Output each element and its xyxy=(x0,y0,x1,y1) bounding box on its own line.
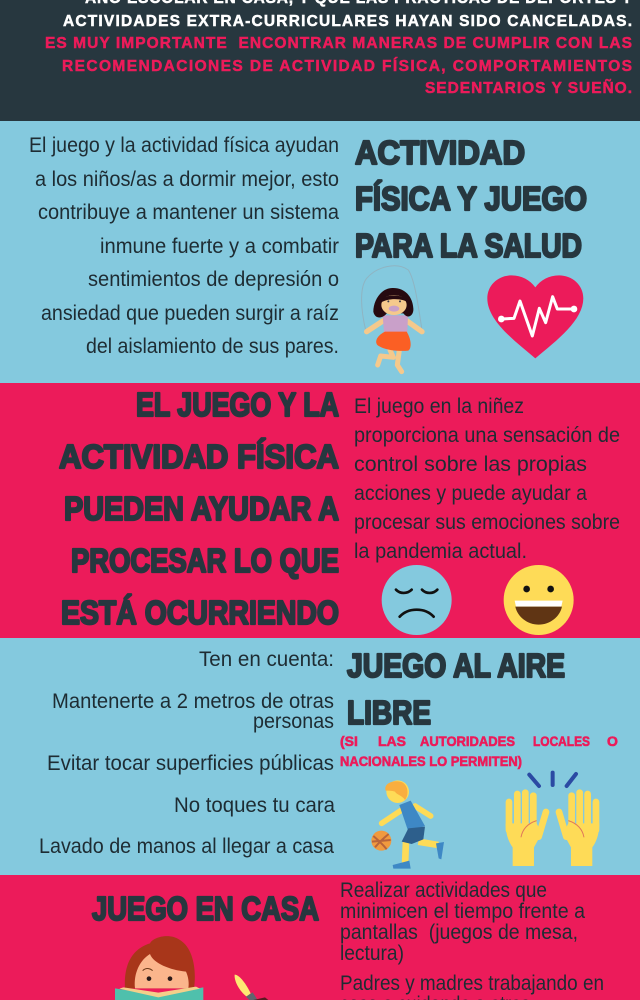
text block: health benefits xyxy=(29,134,339,358)
clap marks xyxy=(529,773,576,786)
text block: ten en cuenta: personas xyxy=(253,710,334,733)
right hand xyxy=(559,793,599,866)
text block: actividades en casa: Padres y madres trabajando en xyxy=(340,972,604,995)
text block: ten en cuenta: Lavado de manos al llegar a casa xyxy=(39,835,334,858)
icon: happy face xyxy=(504,565,574,635)
text block: health benefits: El juego y la actividad física ayudan xyxy=(29,134,339,157)
text block: sensación de control: proporciona una sensación de xyxy=(354,424,620,447)
text block: ten en cuenta: Ten en cuenta: xyxy=(199,648,334,671)
panel: procesar lo que está ocurriendo xyxy=(0,383,640,638)
icon: raised hands xyxy=(506,773,599,866)
heading: procesar: ESTÁ OCURRIENDO xyxy=(61,594,339,631)
text block: health benefits: contribuye a mantener un sistema xyxy=(38,201,339,224)
text block: actividades en casa xyxy=(340,879,604,1000)
text block: sensación de control xyxy=(354,395,620,563)
text block: sensación de control: control sobre las propias xyxy=(354,453,587,476)
heading: actividad física xyxy=(355,134,587,264)
text block: ten en cuenta: Evitar tocar superficies públicas xyxy=(47,752,334,775)
heading: procesar xyxy=(59,386,339,631)
text block: health benefits: inmune fuerte y a combatir xyxy=(100,235,339,258)
text block: sensación de control: procesar sus emociones sobre xyxy=(354,511,620,534)
panel: actividad física y juego xyxy=(0,121,640,383)
text block: ten en cuenta: No toques tu cara xyxy=(174,794,335,817)
panel: juego en casa xyxy=(0,875,640,1000)
text block: ten en cuenta xyxy=(39,648,335,858)
intro text white xyxy=(63,0,633,30)
icon: girl jumping rope xyxy=(362,266,422,372)
panel: juego al aire libre xyxy=(0,638,640,875)
icon: sad face xyxy=(382,565,452,635)
heading: actividad física: ACTIVIDAD xyxy=(355,134,525,171)
subheading: autoridades: NACIONALES LO PERMITEN) xyxy=(340,753,522,769)
text block: actividades en casa: pantallas (juegos de mesa, xyxy=(340,921,578,944)
text block: health benefits: ansiedad que pueden surgir a raíz xyxy=(41,302,339,325)
subheading: autoridades: AUTORIDADES xyxy=(420,733,515,749)
text block: actividades en casa: Realizar actividades que xyxy=(340,879,547,902)
subheading: autoridades: (SI xyxy=(340,733,358,749)
panel: intro xyxy=(0,0,640,121)
heading: procesar: PUEDEN AYUDAR A xyxy=(64,490,339,527)
text block: actividades en casa: minimicen el tiempo frente a xyxy=(340,900,585,923)
heading: actividad física: FÍSICA Y JUEGO xyxy=(355,180,587,217)
text block: sensación de control: El juego en la niñez xyxy=(354,395,524,418)
subheading: autoridades: O xyxy=(607,733,618,749)
heading: juego al aire libre: LIBRE xyxy=(347,694,431,731)
heading: actividad física: PARA LA SALUD xyxy=(355,227,582,264)
intro text pink xyxy=(45,35,632,97)
heading: procesar: PROCESAR LO QUE xyxy=(71,542,339,579)
text block: health benefits: sentimientos de depresión o xyxy=(88,268,339,291)
heading: juego al aire libre: JUEGO AL AIRE xyxy=(347,647,565,684)
heading: juego en casa: JUEGO EN CASA xyxy=(92,890,319,927)
icon: child dribbling ball xyxy=(371,780,444,869)
icon: child reading book xyxy=(115,936,203,1000)
heading: procesar: EL JUEGO Y LA xyxy=(136,386,339,423)
heading: procesar: ACTIVIDAD FÍSICA xyxy=(59,438,339,475)
intro text pink: RECOMENDACIONES DE ACTIVIDAD FÍSICA, COMPORTAMIENTOS xyxy=(62,58,632,75)
icon: heart with pulse xyxy=(487,275,583,358)
subheading: autoridades xyxy=(340,733,618,769)
subheading: autoridades: LOCALES xyxy=(533,733,590,749)
intro text pink: ES MUY IMPORTANTE ENCONTRAR MANERAS DE CUMPLIR CON LAS xyxy=(45,35,632,52)
heading: juego al aire libre xyxy=(347,647,565,731)
text block: sensación de control: acciones y puede ayudar a xyxy=(354,482,587,505)
text block: actividades en casa: lectura) xyxy=(340,942,404,965)
subheading: autoridades: LAS xyxy=(378,733,406,749)
text block: health benefits: a los niños/as a dormir mejor, esto xyxy=(35,168,339,191)
icon: pencil xyxy=(235,975,268,1000)
text block: ten en cuenta: Mantenerte a 2 metros de otras xyxy=(52,690,334,713)
intro text pink: SEDENTARIOS Y SUEÑO. xyxy=(425,79,632,97)
intro text white: ACTIVIDADES EXTRA-CURRICULARES HAYAN SIDO CANCELADAS. xyxy=(63,13,632,30)
text block: health benefits: del aislamiento de sus pares. xyxy=(86,335,339,358)
text block: sensación de control: la pandemia actual. xyxy=(354,540,527,563)
left hand xyxy=(506,793,546,866)
